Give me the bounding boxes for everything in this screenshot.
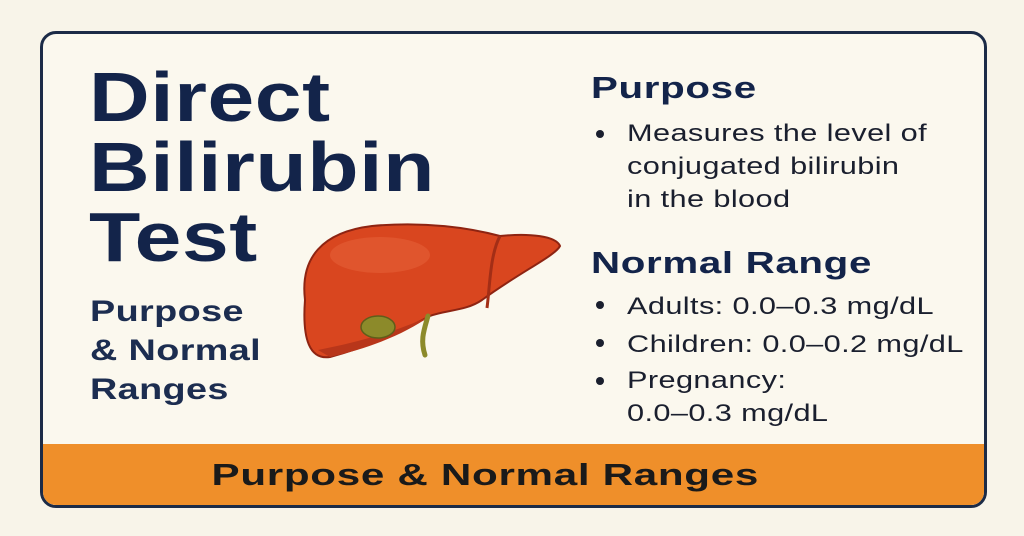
bottom banner: Purpose & Normal Ranges <box>212 457 759 492</box>
normal range bullets: 0.0–0.3 mg/dL <box>627 400 828 427</box>
purpose bullets: Measures the level of <box>627 120 927 147</box>
heading: normal range: Normal Range <box>591 245 872 280</box>
purpose bullets: in the blood <box>627 186 790 213</box>
subtitle: & Normal <box>90 334 261 367</box>
title <box>89 58 435 276</box>
purpose bullets: conjugated bilirubin <box>627 153 899 180</box>
normal range bullets: Children: 0.0–0.2 mg/dL <box>627 331 964 358</box>
heading: purpose: Purpose <box>591 70 757 105</box>
subtitle: Purpose <box>90 295 244 328</box>
purpose bullets <box>596 120 927 213</box>
subtitle <box>90 295 261 406</box>
normal range bullets: Adults: 0.0–0.3 mg/dL <box>627 293 934 320</box>
normal range bullets: Pregnancy: <box>627 367 786 394</box>
bottom banner <box>43 444 984 505</box>
title: Direct <box>89 58 331 136</box>
title: Test <box>89 198 258 276</box>
normal range bullets <box>596 293 964 427</box>
title: Bilirubin <box>89 128 435 206</box>
subtitle: Ranges <box>90 373 229 406</box>
